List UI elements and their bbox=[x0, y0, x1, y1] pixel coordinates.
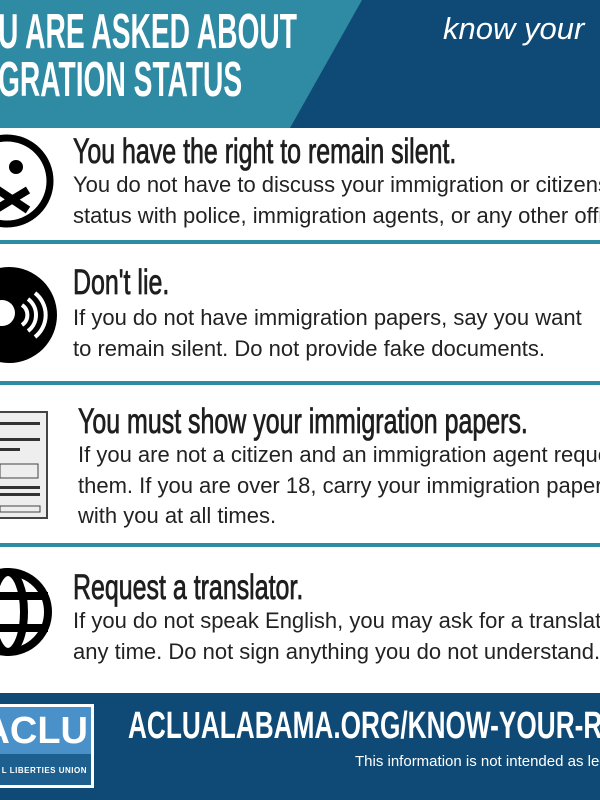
heading: Don't lie. bbox=[73, 263, 169, 302]
text bbox=[73, 172, 600, 228]
icon: document bbox=[0, 411, 48, 519]
icon: speaking head bbox=[0, 267, 57, 363]
panel: silent bbox=[0, 132, 600, 228]
text bbox=[78, 442, 600, 528]
heading: Request a translator. bbox=[73, 568, 303, 607]
title bbox=[0, 5, 297, 107]
text bbox=[73, 608, 600, 664]
logo: ACLU bbox=[0, 704, 94, 788]
heading: You must show your immigration papers. bbox=[78, 402, 528, 441]
title: U ARE ASKED ABOUT bbox=[0, 5, 297, 59]
text: them. If you are over 18, carry your immigration papers bbox=[78, 472, 600, 498]
panel: don't lie bbox=[0, 263, 582, 363]
text: If you do not have immigration papers, say you want bbox=[73, 305, 582, 330]
icon: taped mouth face bbox=[0, 134, 54, 228]
footer bbox=[0, 693, 600, 800]
text: to remain silent. Do not provide fake documents. bbox=[73, 336, 545, 360]
text: with you at all times. bbox=[78, 503, 276, 528]
text: any time. Do not sign anything you do not understand. bbox=[73, 638, 600, 664]
heading: You have the right to remain silent. bbox=[73, 132, 456, 171]
title: GRATION STATUS bbox=[0, 53, 242, 107]
icon: globe bbox=[0, 568, 52, 656]
panel: translator bbox=[0, 568, 600, 664]
panel: papers bbox=[0, 402, 600, 528]
text bbox=[73, 305, 582, 360]
header banner bbox=[0, 0, 600, 128]
logo: ACLU: L LIBERTIES UNION bbox=[2, 766, 87, 775]
